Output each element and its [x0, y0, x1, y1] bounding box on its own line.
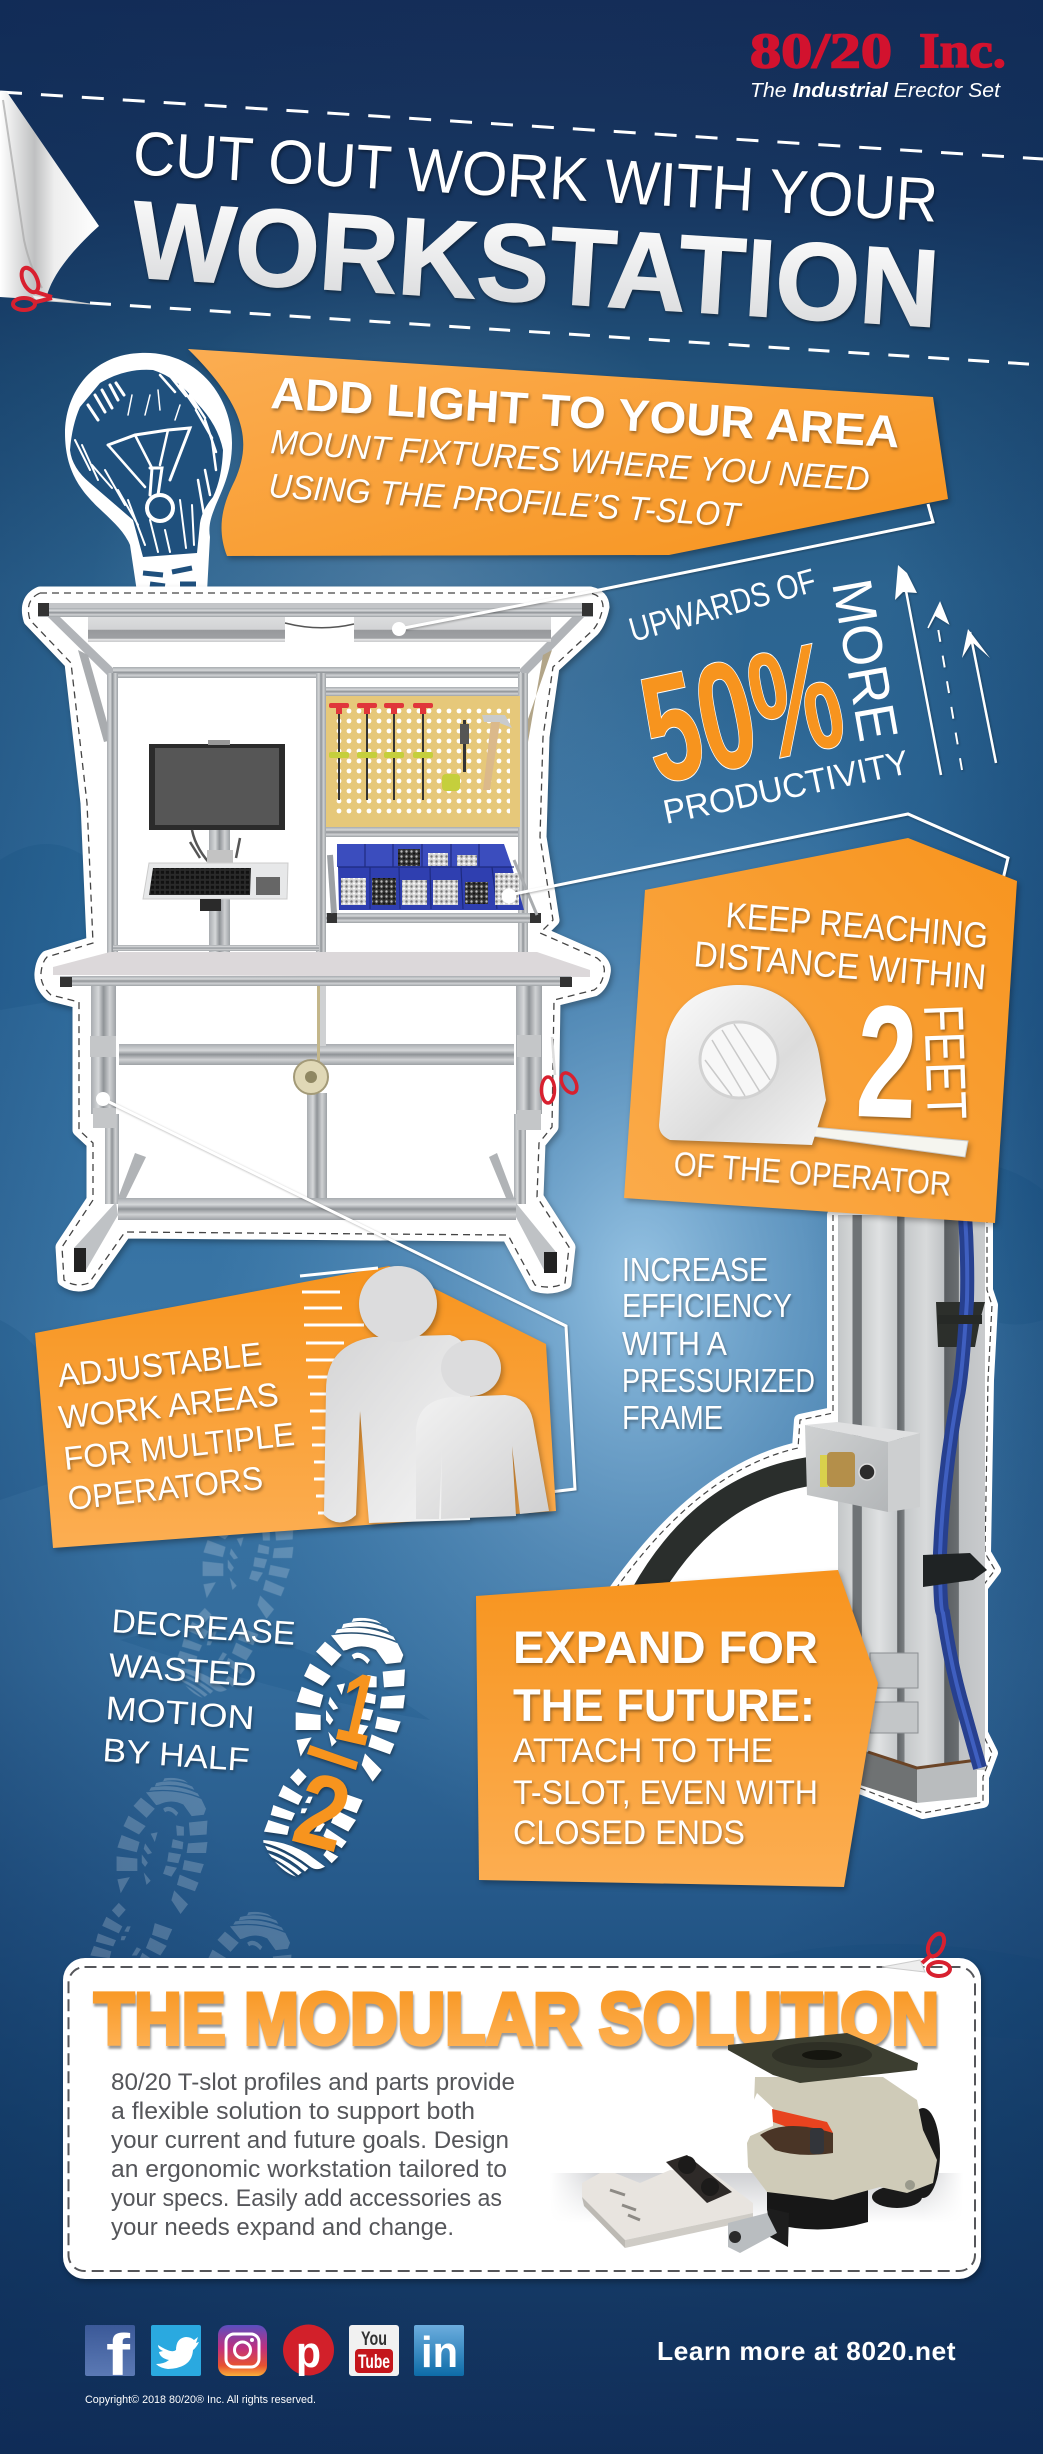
adjustable text: ADJUSTABLE — [56, 1335, 264, 1394]
product photo: caster and fittings — [550, 2033, 963, 2253]
text: increase efficiency: WITH A — [622, 1325, 727, 1362]
people silhouettes — [324, 1266, 549, 1523]
icon: linkedin: in — [421, 2328, 458, 2377]
icon: twitter — [151, 2325, 201, 2376]
reach text: OF THE OPERATOR — [672, 1145, 952, 1204]
big number 2 feet: FEET — [912, 1003, 979, 1120]
expand text: THE FUTURE: — [513, 1680, 815, 1731]
icon: tape measure — [659, 985, 968, 1157]
modular body text: your current and future goals. Design — [111, 2127, 509, 2154]
arrows: upward sketch — [895, 565, 996, 775]
panel: adjustable work areas — [35, 1266, 556, 1548]
title: WORKSTATION — [129, 178, 943, 351]
frame top and lights — [38, 603, 593, 742]
link: learn more: Learn more at 8020.net — [657, 2336, 956, 2366]
reach text: DISTANCE WITHIN — [692, 933, 988, 997]
adjustable text: FOR MULTIPLE — [62, 1415, 296, 1477]
cut line: lower dashed — [90, 303, 1043, 365]
icon: instagram — [218, 2325, 267, 2376]
mounting block — [805, 1422, 920, 1512]
banner heading: MOUNT FIXTURES WHERE YOU NEED — [269, 423, 871, 499]
icon: light bulb — [65, 353, 232, 592]
peeled paper corner — [0, 92, 99, 300]
modular body text: an ergonomic workstation tailored to — [111, 2156, 507, 2183]
icon: facebook — [85, 2323, 135, 2388]
icon: youtube — [349, 2325, 399, 2376]
clip: upper cable tie mount — [936, 1302, 985, 1347]
text: increase efficiency: FRAME — [622, 1399, 723, 1436]
pressurized frame cut-out — [615, 1215, 995, 1813]
text: increase efficiency: PRESSURIZED — [622, 1362, 815, 1399]
logo: 80/20 Inc.: Inc. — [919, 22, 1006, 78]
icon: white boot print one half: 2 — [283, 1750, 361, 1875]
big number 2 feet: 2 — [854, 971, 920, 1152]
expand text: EXPAND FOR — [513, 1622, 818, 1673]
icon: white boot print one half — [263, 1618, 405, 1877]
callout line: add light — [399, 504, 933, 629]
social icons — [85, 2323, 464, 2388]
adjustable text — [56, 1335, 296, 1517]
modular heading: THE MODULAR SOLUTION — [94, 1979, 939, 2060]
icon: youtube: Tube — [358, 2352, 390, 2373]
text: decrease wasted motion: WASTED — [108, 1646, 258, 1693]
icon: white boot print one half: 1 — [327, 1650, 387, 1768]
modular body text: your specs. Easily add accessories as — [111, 2185, 502, 2212]
text: increase efficiency: INCREASE — [622, 1251, 768, 1288]
adjustable text: OPERATORS — [66, 1459, 265, 1517]
callout line: adjustable — [103, 1099, 575, 1492]
banner heading — [267, 367, 901, 535]
logo: 80/20 Inc.: The Industrial Erector Set — [750, 79, 1001, 102]
clip: lower tube clamp — [923, 1553, 987, 1587]
expand text: ATTACH TO THE — [513, 1732, 773, 1770]
copyright: Copyright© 2018 80/20® Inc. All rights reserved. — [85, 2394, 316, 2406]
rubber hose — [645, 1470, 820, 1595]
modular body text: your needs expand and change. — [111, 2214, 454, 2241]
modular body text: a flexible solution to support both — [111, 2098, 475, 2125]
callout: 50% more productivity: PRODUCTIVITY — [660, 744, 912, 832]
faded footprints — [90, 1483, 293, 2127]
expand text — [513, 1622, 818, 1852]
aluminum profile — [838, 1215, 985, 1803]
expand text: CLOSED ENDS — [513, 1814, 745, 1852]
callout dots — [96, 622, 516, 1106]
icon: pinterest: p — [296, 2328, 321, 2377]
t-slot fitting — [582, 2155, 753, 2248]
modular body text — [111, 2069, 515, 2241]
title: CUT OUT WORK WITH YOUR — [131, 119, 940, 236]
expand text: T-SLOT, EVEN WITH — [513, 1774, 818, 1812]
text: increase efficiency — [622, 1251, 815, 1436]
logo: 80/20 Inc. — [750, 22, 1006, 102]
panel: expand for the future — [476, 1570, 878, 1887]
icon: facebook: f — [106, 2323, 131, 2388]
panel: add light — [188, 349, 948, 556]
blue air line — [940, 1215, 980, 1768]
workstation cut-out — [28, 593, 604, 1287]
panel: keep reaching — [624, 838, 1017, 1223]
pegboard and tools — [326, 696, 520, 827]
icon: scissors on workstation — [542, 1037, 580, 1103]
banner heading: USING THE PROFILE’S T-SLOT — [267, 467, 743, 535]
callout: 50% more productivity: UPWARDS OF — [625, 562, 820, 650]
monitor — [143, 740, 288, 911]
adjustable text: WORK AREAS — [57, 1375, 280, 1436]
logo: 80/20 Inc.: 80/20 — [750, 22, 892, 78]
banner heading: ADD LIGHT TO YOUR AREA — [269, 367, 901, 458]
icon: scissors top left — [13, 265, 90, 310]
tie strap — [938, 1315, 982, 1324]
reach text: KEEP REACHING — [724, 894, 990, 956]
frame uprights — [107, 673, 528, 953]
reach text — [672, 894, 990, 1204]
icon: pinterest — [283, 2324, 334, 2377]
desk top — [53, 952, 590, 987]
panel: the modular solution — [63, 1931, 981, 2279]
callout: 50% more productivity: 50% — [628, 609, 857, 816]
text: decrease wasted motion: DECREASE — [111, 1602, 297, 1652]
cut line: top dashed — [0, 92, 1043, 159]
ruler ticks — [300, 1268, 378, 1513]
parts bins — [326, 844, 541, 923]
text: increase efficiency: EFFICIENCY — [622, 1287, 792, 1324]
modular body text: 80/20 T-slot profiles and parts provide — [111, 2069, 515, 2096]
icon: scissors on card — [882, 1931, 950, 1976]
caster — [728, 2033, 940, 2230]
legs and frame — [74, 986, 557, 1273]
text: decrease wasted motion — [102, 1602, 297, 1778]
text: decrease wasted motion: MOTION — [105, 1689, 256, 1736]
text: decrease wasted motion: BY HALF — [102, 1731, 251, 1778]
small connector — [728, 2208, 789, 2253]
icon: youtube: You — [361, 2329, 387, 2350]
callout: 50% more productivity: MORE — [820, 574, 911, 746]
callout line: reach — [509, 814, 1008, 895]
